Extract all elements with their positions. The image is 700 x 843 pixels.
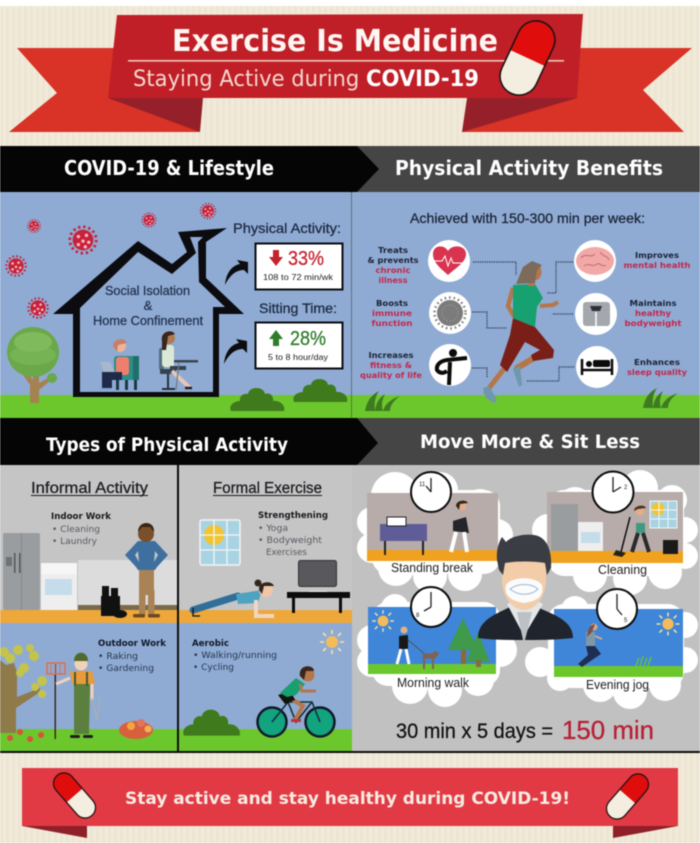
panel: Move More & Sit Less	[352, 465, 700, 752]
benefit: sleep: Enhances	[634, 358, 680, 367]
text: aerobic: • Cycling	[193, 663, 234, 673]
panel: Types of Physical Activity	[0, 465, 352, 752]
icon: pill left	[49, 769, 100, 822]
bushes	[230, 388, 284, 411]
person on armchair	[100, 339, 139, 390]
clock: 5: 5	[624, 618, 628, 624]
clock: 11: 11	[419, 482, 426, 488]
stat: sitting time: Sitting Time:	[259, 300, 337, 316]
stat: sitting time: 28%	[290, 328, 326, 350]
bottom rule	[0, 751, 700, 754]
text: indoor work: • Cleaning	[52, 525, 100, 535]
text: indoor work: Indoor Work	[51, 512, 111, 522]
text: indoor work: • Laundry	[52, 537, 97, 547]
text: outdoor work: • Raking	[98, 652, 138, 662]
benefit: mental health: Improves	[635, 251, 679, 260]
benefit: fitness: fitness &	[370, 361, 412, 370]
benefit: treats chronic illness: Treats	[378, 246, 408, 255]
icon: scale	[575, 293, 617, 335]
benefit: mental health: mental health	[624, 261, 691, 270]
title: Exercise Is Medicine	[172, 24, 498, 59]
clock: 11	[411, 472, 451, 512]
top cream background	[0, 6, 700, 146]
benefit: fitness: quality of life	[360, 371, 423, 380]
benefit: immune function: Boosts	[376, 299, 408, 308]
scene: morning walk	[368, 607, 496, 674]
clock: 8	[411, 587, 451, 627]
text: outdoor work: • Gardening	[98, 664, 154, 674]
person at desk	[159, 331, 198, 390]
benefit: mental health	[624, 251, 691, 270]
caption: Standing break	[391, 561, 474, 575]
text: aerobic: Aerobic	[192, 639, 229, 649]
icon: brain	[574, 240, 616, 282]
text: strengthening: • Bodyweight	[258, 536, 323, 546]
benefit: treats chronic illness: illness	[378, 276, 408, 285]
stat: physical activity	[233, 220, 342, 290]
icon: virus	[429, 292, 471, 334]
man standing	[125, 523, 168, 618]
text: strengthening: Strengthening	[258, 511, 328, 521]
title ribbon	[9, 14, 692, 132]
text: outdoor work: Outdoor Work	[98, 639, 166, 649]
panel: Physical Activity Benefits	[351, 192, 700, 418]
heading: informal activity: Informal Activity	[31, 480, 148, 497]
benefit: immune function	[372, 299, 413, 328]
stat: sitting time	[256, 300, 342, 368]
benefit: sleep: sleep quality	[627, 368, 688, 377]
scene: evening jog	[554, 609, 683, 677]
icon: heart	[428, 240, 470, 282]
benefit: treats chronic illness: chronic	[376, 266, 411, 275]
caption: Evening jog	[586, 678, 649, 692]
header bar: middle: Move More & Sit Less	[420, 431, 640, 453]
scene: standing break	[367, 493, 498, 561]
bottom banner	[22, 768, 678, 838]
cloud: evening jog	[525, 596, 698, 709]
benefit: immune function: function	[372, 319, 413, 328]
formula	[396, 715, 654, 745]
panel: COVID-19 & Lifestyle	[0, 192, 351, 418]
cleaning products	[101, 586, 127, 618]
plank woman	[193, 580, 274, 616]
header bar: top	[0, 146, 700, 192]
heading: types of physical activity: Types of Physical Activity	[46, 434, 289, 456]
leaf pile	[119, 719, 153, 739]
text: strengthening	[258, 511, 328, 558]
runner	[483, 261, 558, 403]
benefit: fitness	[360, 351, 423, 380]
clock: 8: 8	[416, 613, 420, 619]
text: aerobic: • Walking/running	[193, 651, 277, 661]
clock: 2	[592, 472, 634, 512]
text: social isolation: Home Confinement	[93, 313, 203, 328]
tree	[7, 327, 59, 403]
house	[53, 228, 244, 397]
clock: 5	[597, 589, 637, 629]
subheading: Achieved with 150-300 min per week:	[410, 210, 645, 226]
stat: sitting time: 5 to 8 hour/day	[268, 352, 329, 362]
man with mask	[478, 535, 573, 640]
arrow: to sitting time	[224, 339, 247, 364]
bottom cream background	[0, 753, 700, 843]
formula: 30 min x 5 days =	[396, 720, 553, 743]
benefit: bodyweight: healthy	[635, 309, 672, 318]
arrow: to physical activity	[225, 260, 248, 285]
tree with autumn leaves	[0, 644, 47, 742]
vertical divider	[177, 465, 179, 752]
banner text: Stay active and stay healthy during COVID-19!	[125, 789, 570, 808]
scene: cleaning	[547, 492, 683, 563]
window	[200, 520, 240, 565]
caption: Morning walk	[397, 676, 470, 690]
text: social isolation: Social Isolation	[105, 283, 190, 298]
text: indoor work	[51, 512, 111, 547]
icon: pill right	[602, 770, 653, 823]
header bar: top: Physical Activity Benefits	[395, 156, 663, 180]
clock: 2: 2	[624, 485, 628, 491]
grass tufts	[365, 391, 400, 411]
icon: fitness figure	[429, 344, 471, 386]
benefit: bodyweight: Maintains	[630, 299, 677, 308]
connector lines	[472, 262, 574, 381]
header bar: middle	[0, 418, 700, 465]
stat: physical activity: Physical Activity:	[233, 220, 341, 236]
benefit: bodyweight: bodyweight	[624, 319, 682, 328]
kitchen appliances	[3, 533, 177, 610]
TV and table	[287, 560, 350, 613]
viruses	[6, 204, 215, 318]
stat: physical activity: 33%	[288, 248, 324, 270]
benefit: immune function: immune	[372, 309, 413, 318]
benefit: treats chronic illness: & prevents	[368, 256, 419, 265]
formula: 150 min	[562, 715, 654, 745]
cyclist	[258, 666, 334, 736]
cloud: cleaning	[532, 470, 698, 595]
icon: pill	[494, 15, 561, 101]
cloud: morning walk	[357, 594, 517, 707]
text: strengthening: Exercises	[266, 548, 308, 558]
bush	[183, 710, 240, 736]
cloud: standing break	[357, 472, 513, 593]
woman with rake	[47, 653, 100, 739]
heading: formal exercise: Formal Exercise	[213, 480, 322, 497]
icon: bed	[576, 346, 618, 388]
stat: physical activity: 108 to 72 min/wk	[263, 272, 334, 282]
text: social isolation	[93, 283, 203, 328]
text: outdoor work	[98, 639, 166, 674]
text: strengthening: • Yoga	[258, 524, 288, 534]
heading: COVID-19 & Lifestyle: COVID-19 & Lifestyle	[64, 156, 274, 180]
benefit: bodyweight	[624, 299, 682, 328]
benefit: treats chronic illness	[368, 246, 419, 285]
sun	[320, 630, 344, 654]
benefit: sleep	[627, 358, 688, 377]
benefit: fitness: Increases	[368, 351, 414, 360]
subtitle: Staying Active during COVID-19	[133, 67, 479, 92]
text: social isolation: &	[144, 298, 153, 313]
caption: Cleaning	[598, 563, 647, 577]
text: aerobic	[192, 639, 277, 673]
